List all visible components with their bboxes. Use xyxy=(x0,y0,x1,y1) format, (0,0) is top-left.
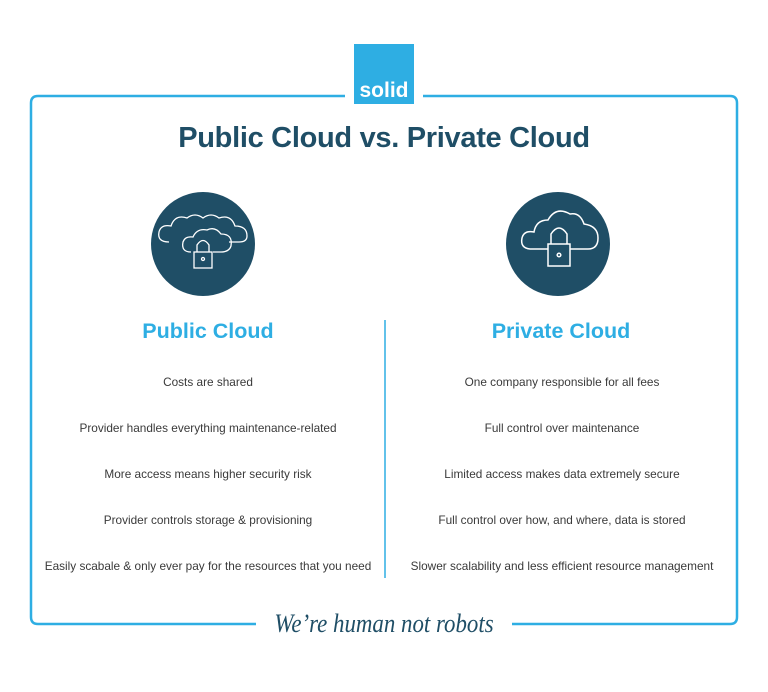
title: Public Cloud vs. Private Cloud xyxy=(178,122,590,154)
list: private: Full control over how, and where, data is stored xyxy=(438,513,686,527)
list: private xyxy=(411,375,714,573)
icon: public cloud xyxy=(151,192,255,296)
logo: solid xyxy=(359,79,408,102)
list: private: Limited access makes data extremely secure xyxy=(444,467,680,481)
list: public: More access means higher security risk xyxy=(104,467,312,481)
list: public: Provider handles everything maintenance-related xyxy=(79,421,337,435)
list: public: Easily scabale & only ever pay for the resources that you need xyxy=(45,559,371,573)
list: public: Costs are shared xyxy=(163,375,253,389)
logo xyxy=(354,44,414,104)
list: private: Slower scalability and less efficient resource management xyxy=(411,559,713,573)
icon: private cloud xyxy=(506,192,610,296)
divider xyxy=(384,320,386,578)
heading: public: Public Cloud xyxy=(142,319,274,343)
list: private: Full control over maintenance xyxy=(485,421,639,435)
list: private: One company responsible for all fees xyxy=(465,375,659,389)
list: public: Provider controls storage & provisioning xyxy=(104,513,312,527)
list: public xyxy=(45,375,371,573)
tagline: We’re human not robots xyxy=(274,609,494,638)
heading: private: Private Cloud xyxy=(492,319,630,343)
